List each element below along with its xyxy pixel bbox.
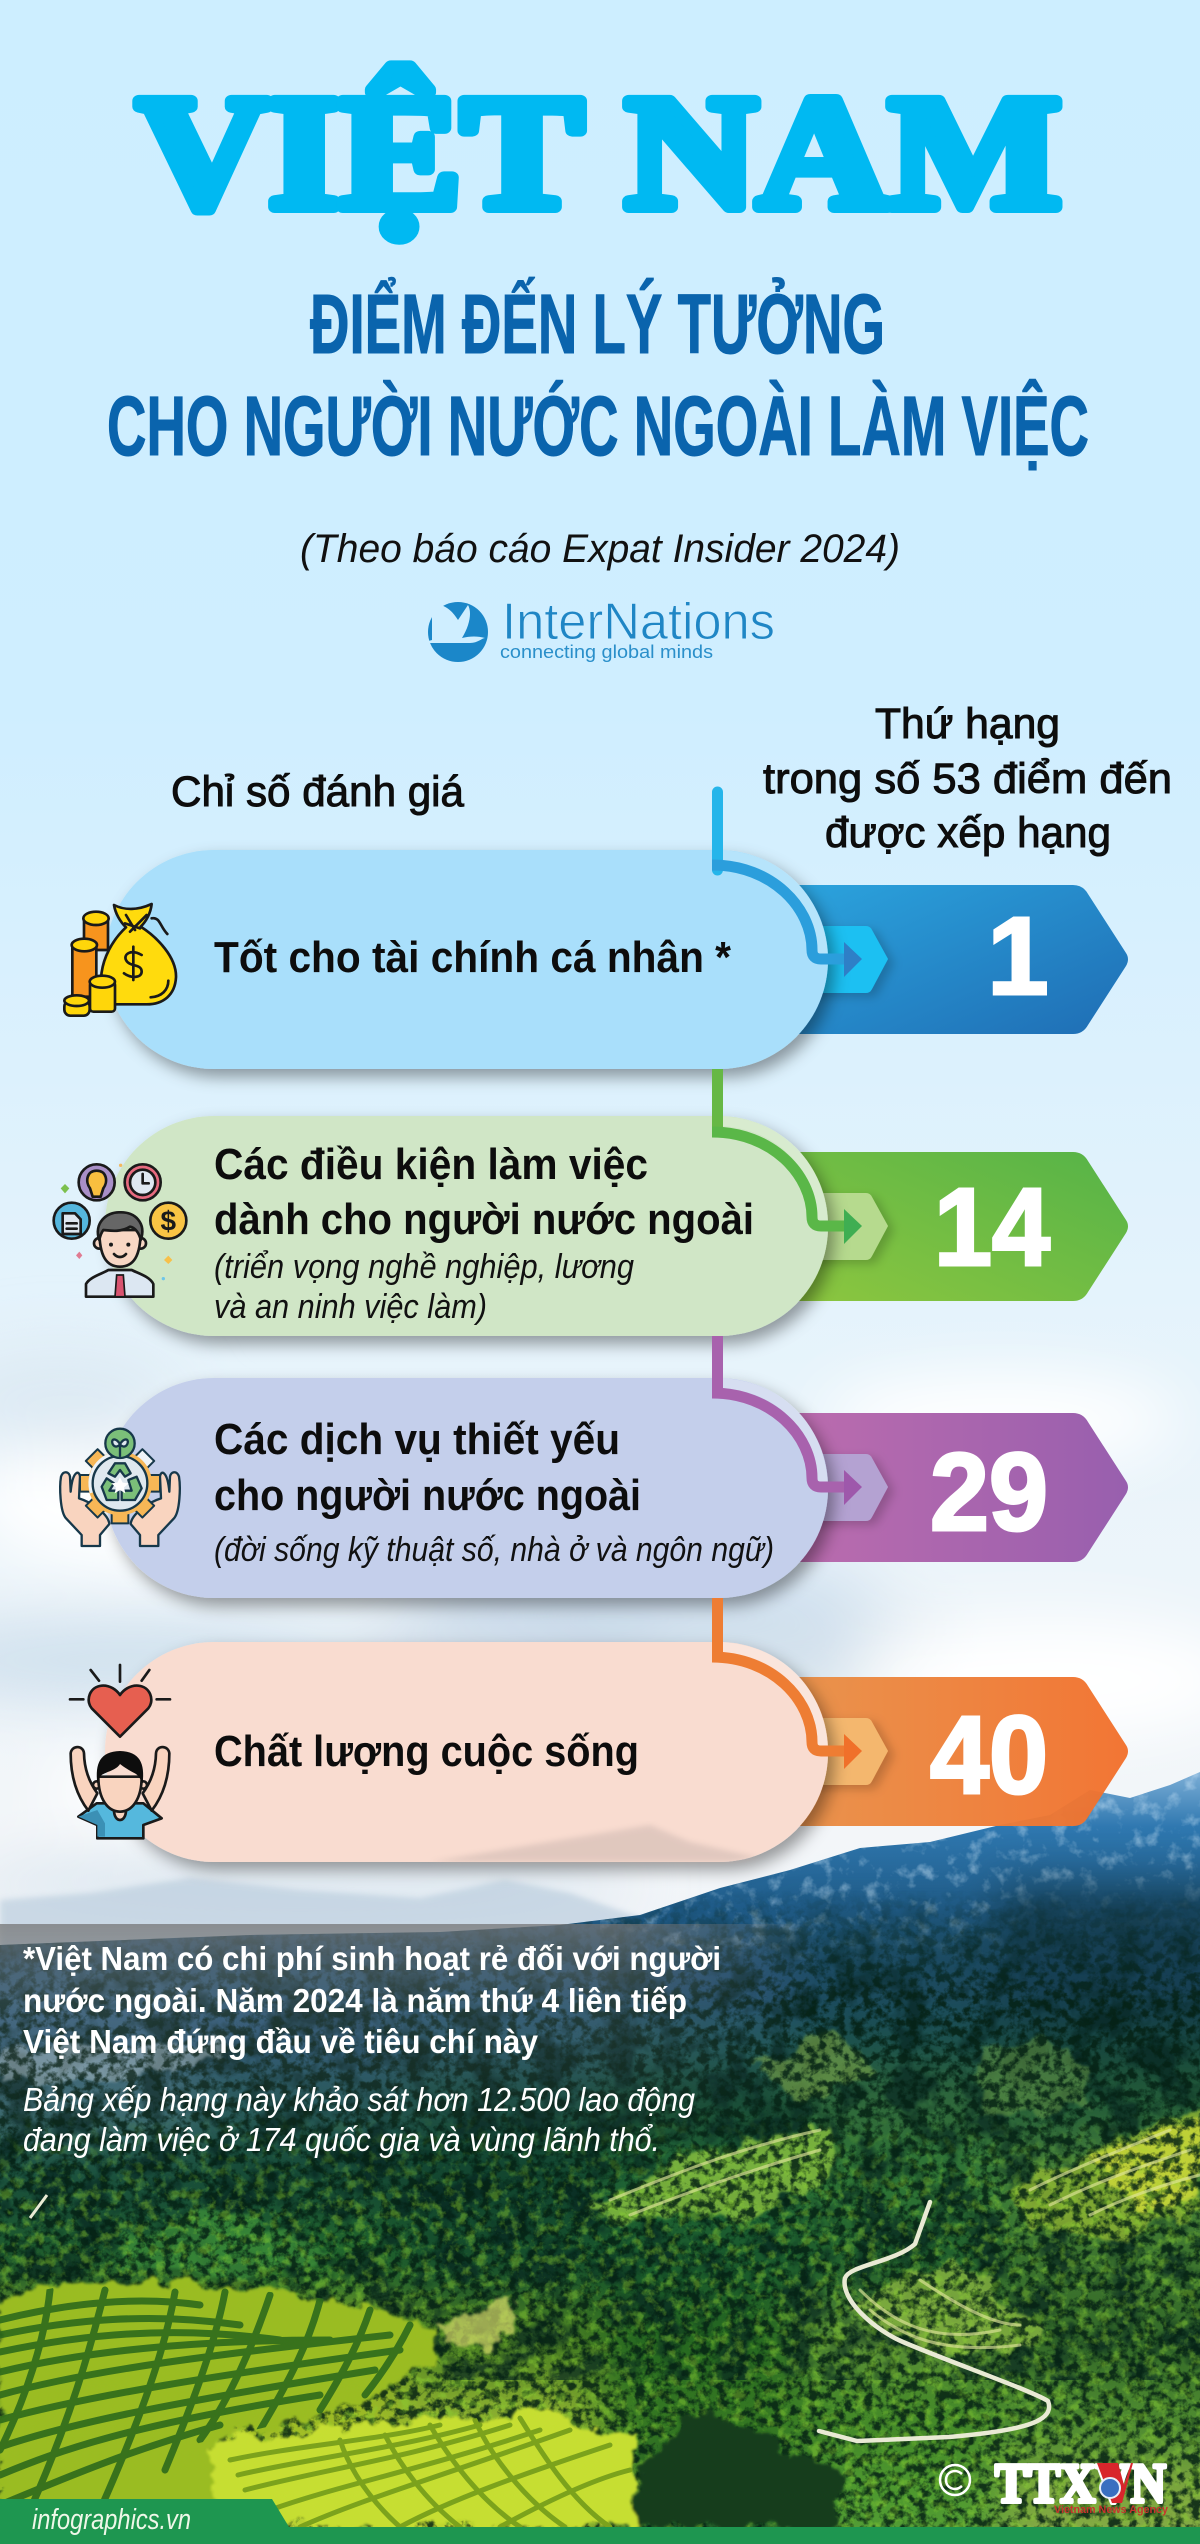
source note: (Theo báo cáo Expat Insider 2024) [300, 527, 900, 571]
icon: hands with recycling gear [60, 1429, 180, 1546]
title: VIỆT NAM [137, 64, 1061, 243]
pill text 3: Các dịch vụ thiết yếu [214, 1415, 620, 1464]
connector arrow 1 [712, 792, 862, 977]
footnote bold [23, 1940, 721, 2060]
footnote italic: Bảng xếp hạng này khảo sát hơn 12.500 lao động [23, 2081, 696, 2118]
rank number 14: 14 [934, 1166, 1050, 1289]
winding road [819, 2202, 1049, 2441]
icon: employee with ideas: $ [161, 1206, 177, 1237]
panel: rank 1 finance [105, 792, 1128, 1069]
icon: money bag and coins [64, 904, 176, 1016]
logo: TTXVN [940, 2453, 1169, 2516]
pill text 2 [214, 1140, 754, 1326]
panel: footnote [0, 1924, 820, 2158]
rank arrow box 4 [795, 1677, 1128, 1826]
column heading: rank: được xếp hạng [825, 809, 1111, 857]
website: infographics.vn [32, 2504, 191, 2536]
lit slopes [0, 2030, 1200, 2360]
footnote italic [23, 2081, 696, 2158]
chevron 3 [800, 1454, 888, 1521]
pill text 3: cho người nước ngoài [214, 1471, 641, 1520]
far hazy hills [0, 1878, 690, 1950]
terraces right [610, 2130, 1200, 2348]
rank number 1: 1 [987, 895, 1049, 1018]
footnote bold: nước ngoài. Năm 2024 là năm thứ 4 liên tiếp [23, 1982, 687, 2019]
connector arrow 3 [712, 1336, 862, 1505]
chevron 2 [800, 1193, 888, 1260]
pill text 2: Các điều kiện làm việc [214, 1140, 648, 1189]
pill text 2: và an ninh việc làm) [214, 1288, 487, 1326]
pill text 2: dành cho người nước ngoài [214, 1195, 754, 1244]
pill text 3 [214, 1415, 774, 1569]
icon: bird in circle [425, 602, 488, 662]
rank number 40: 40 [930, 1694, 1048, 1817]
pill text 1: Tốt cho tài chính cá nhân * [214, 933, 732, 982]
panel: rank 40 quality of life [105, 1598, 1128, 1862]
tagline: connecting global minds [500, 642, 713, 662]
logo: InterNations [425, 593, 775, 662]
chevron 4 [800, 1718, 888, 1785]
footnote bold: Việt Nam đứng đầu về tiêu chí này [23, 2023, 539, 2060]
dark forest patches [0, 1850, 1200, 2380]
background: mountain and rice terrace landscape [0, 1760, 1200, 2544]
rank arrow box 2 [795, 1152, 1128, 1301]
grey backdrop [0, 1924, 796, 2106]
panel: rank 29 essential services [105, 1336, 1128, 1598]
copyright mark [940, 2465, 970, 2495]
pill 3 [105, 1378, 828, 1598]
red V and globe [1097, 2463, 1133, 2503]
footnote italic: đang làm việc ở 174 quốc gia và vùng lãnh thổ. [23, 2121, 660, 2158]
agency name: Vietnam News Agency [1054, 2504, 1169, 2516]
column heading: rank: Thứ hạng [875, 700, 1060, 748]
connector arrow 4 [712, 1598, 862, 1769]
column heading: criteria: Chỉ số đánh giá [171, 768, 464, 816]
pill text 3: (đời sống kỹ thuật số, nhà ở và ngôn ngữ) [214, 1531, 774, 1569]
wordmark: InterNations [502, 593, 775, 651]
pill 1 [105, 850, 828, 1069]
subtitle: ĐIỂM ĐẾN LÝ TƯỞNG [310, 277, 885, 371]
wordmark: TTXVN [995, 2453, 1166, 2515]
pill text 2: (triển vọng nghề nghiệp, lương [214, 1248, 634, 1286]
pill 4 [105, 1642, 828, 1862]
icon: employee with ideas [54, 1164, 186, 1297]
panel: rank 14 working conditions [105, 1069, 1128, 1336]
pill 2 [105, 1116, 828, 1336]
subtitle [107, 277, 1089, 473]
connector arrow 2 [712, 1069, 862, 1244]
footer band [0, 2499, 1200, 2544]
blue ridge [0, 1772, 1200, 2012]
low frequency colour mosaic [0, 1890, 1200, 2544]
column heading: rank: trong số 53 điểm đến [763, 755, 1172, 803]
icon: person raising a heart [70, 1665, 170, 1838]
rank arrow box 1 [795, 885, 1128, 1034]
terraces main [0, 2280, 842, 2527]
forest texture [0, 1850, 1200, 2530]
rank arrow box 3 [795, 1413, 1128, 1562]
hazy hill inside pill 4 [430, 1825, 760, 1862]
column heading: rank [763, 700, 1172, 857]
footnote bold: *Việt Nam có chi phí sinh hoạt rẻ đối với người [23, 1940, 721, 1977]
chevron 1 [800, 926, 888, 993]
rank number 29: 29 [930, 1431, 1048, 1554]
pill text 4: Chất lượng cuộc sống [214, 1727, 639, 1776]
